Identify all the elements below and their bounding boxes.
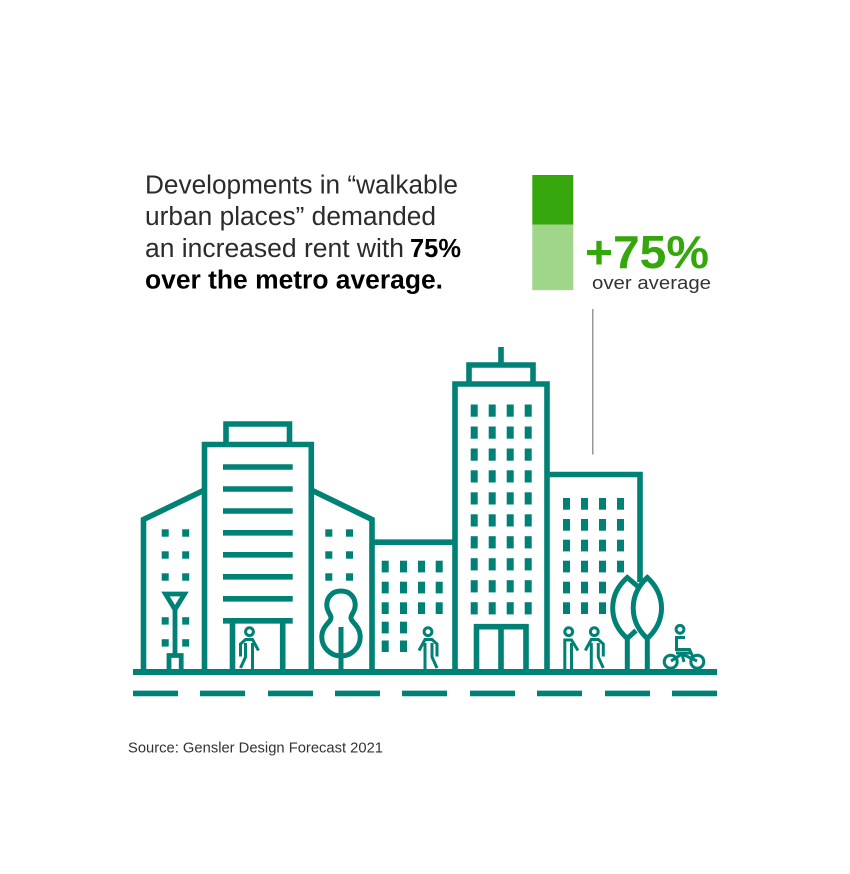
icon: person walking in doorway	[240, 628, 258, 669]
headline text block	[145, 172, 461, 294]
icon: standing person	[565, 628, 578, 669]
stacked bar chart	[532, 175, 573, 290]
callout line	[592, 309, 594, 454]
headline text block: over the metro average.	[145, 266, 443, 294]
building: right wing	[311, 490, 372, 670]
icon: round tree	[322, 591, 360, 670]
headline text block: an increased rent with	[145, 235, 404, 263]
building: tall tower with windows	[455, 347, 547, 670]
headline text block: urban places” demanded	[145, 203, 436, 231]
stat: +75% over average: over average	[592, 272, 711, 293]
building: right block	[547, 474, 640, 614]
headline text block: Developments in “walkable	[145, 172, 458, 200]
source note: Source: Gensler Design Forecast 2021	[128, 740, 383, 756]
building: low middle block	[372, 542, 455, 652]
icon: person walking, middle block	[419, 628, 437, 669]
icon: twin leaf trees	[613, 578, 662, 670]
building: main tower with floor bands	[204, 424, 311, 670]
road dashes	[133, 691, 717, 696]
city illustration	[133, 347, 717, 693]
icon: street lamp	[166, 594, 184, 670]
icon: walking person	[585, 628, 603, 669]
icon: cyclist	[664, 625, 704, 668]
headline text block: 75%	[410, 235, 461, 263]
road surface	[133, 669, 717, 675]
building: left wing	[144, 490, 204, 670]
stat: +75% over average: +75%	[585, 226, 709, 278]
